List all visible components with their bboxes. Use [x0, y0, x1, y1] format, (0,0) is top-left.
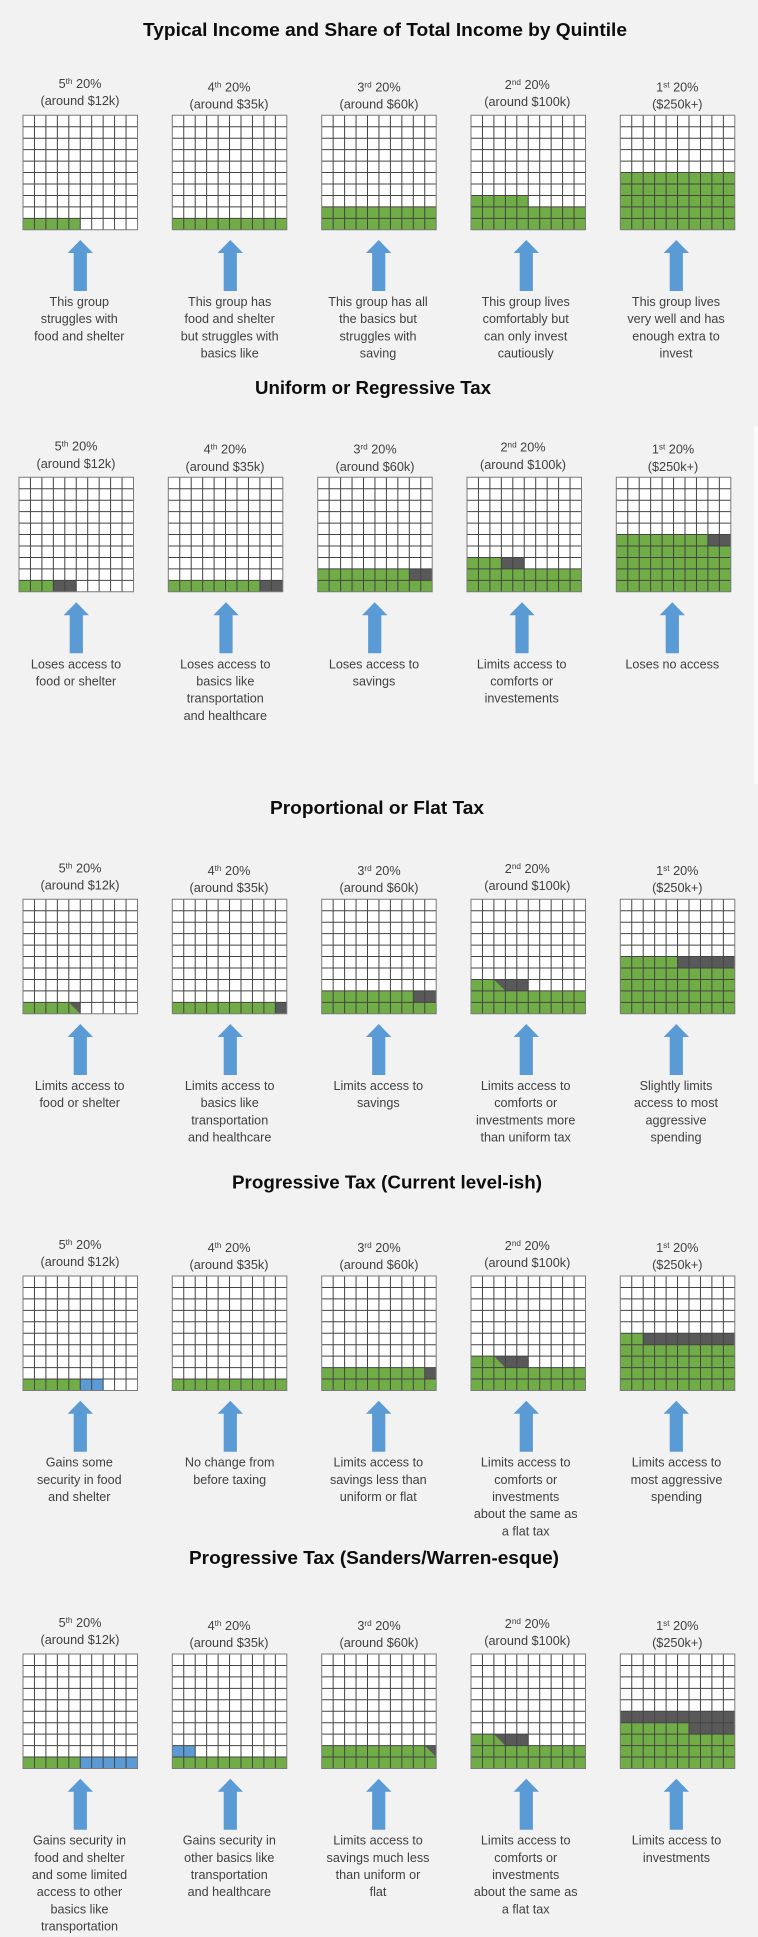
header: 4th 20%: 20% — [221, 864, 250, 878]
header: 1st 20%: st — [663, 80, 670, 89]
grid: 3rd 20% — [322, 115, 436, 230]
header: 2nd 20%: (around $100k) — [484, 879, 570, 893]
description: 2nd 20%: This group lives — [482, 295, 570, 309]
description: 4th 20%: Loses access to — [180, 657, 270, 671]
description: 3rd 20%: savings — [353, 674, 395, 688]
description: 1st 20%: enough extra to — [632, 329, 720, 343]
grid: 3rd 20% — [318, 477, 432, 592]
section: proportional or flat tax — [23, 797, 735, 1144]
title: progressive tax sanders warren: Progressive Tax (Sanders/Warren-esque) — [189, 1547, 559, 1568]
header: 2nd 20%: 20% — [521, 1239, 550, 1253]
description: 1st 20%: Slightly limits — [640, 1079, 712, 1093]
header: 2nd 20%: 2 — [505, 1239, 512, 1253]
header: 1st 20%: ($250k+) — [652, 98, 703, 112]
description: 2nd 20%: than uniform tax — [481, 1130, 572, 1144]
arrow: 3rd 20% — [366, 240, 391, 291]
description: 5th 20%: basics like — [50, 1902, 109, 1916]
header: 3rd 20%: 3 — [357, 80, 364, 94]
description: 2nd 20%: about the same as — [474, 1885, 578, 1899]
description: 5th 20%: Gains security in — [33, 1834, 126, 1848]
grid: 2nd 20% — [471, 899, 586, 1014]
description: 2nd 20%: cautiously — [498, 346, 554, 360]
description: 4th 20%: basics like — [201, 346, 259, 360]
header: 4th 20%: 20% — [221, 80, 250, 94]
header: 3rd 20%: (around $60k) — [340, 1258, 418, 1272]
header: 1st 20%: 1 — [656, 80, 663, 94]
header: 1st 20%: 1 — [656, 1241, 663, 1255]
description: 3rd 20%: savings — [357, 1096, 400, 1110]
header: 4th 20%: 4 — [204, 443, 211, 457]
header: 2nd 20%: nd — [508, 441, 517, 450]
arrow: 2nd 20% — [514, 240, 539, 291]
description: 1st 20%: very well and has — [627, 312, 725, 326]
header: 2nd 20%: 2 — [505, 1617, 512, 1631]
header: 5th 20%: th — [66, 861, 73, 870]
header: 3rd 20%: 20% — [372, 1619, 401, 1633]
header: 1st 20%: st — [663, 1241, 670, 1250]
header: 5th 20%: 5 — [59, 861, 66, 875]
header: 4th 20%: (around $35k) — [190, 1258, 268, 1272]
header: 2nd 20%: 2 — [500, 441, 508, 455]
grid: 2nd 20% — [471, 115, 586, 230]
description: 5th 20%: This group — [50, 295, 109, 309]
description: 4th 20%: No change from — [185, 1456, 275, 1470]
description: 3rd 20%: savings less than — [330, 1473, 427, 1487]
arrow: 2nd 20% — [514, 1401, 539, 1452]
header: 1st 20%: 1 — [656, 864, 663, 878]
grid: 4th 20% — [172, 1276, 287, 1390]
description: 5th 20%: access to other — [37, 1885, 122, 1899]
header: 1st 20%: ($250k+) — [652, 1258, 703, 1272]
grid: 1st 20% — [620, 115, 735, 230]
description: 3rd 20%: flat — [370, 1885, 387, 1899]
grid: 4th 20% — [168, 477, 283, 592]
grid: 4th 20% — [172, 1654, 287, 1768]
description: 4th 20%: transportation — [191, 1868, 268, 1882]
header: 5th 20%: 5 — [59, 1616, 66, 1630]
header: 1st 20%: 20% — [670, 1241, 698, 1255]
description: 2nd 20%: comforts or — [490, 674, 553, 688]
header: 2nd 20%: 2 — [505, 862, 512, 876]
header: 4th 20%: th — [215, 864, 222, 873]
description: 4th 20%: basics like — [196, 674, 254, 688]
description: 5th 20%: security in food — [37, 1473, 122, 1487]
header: 4th 20%: (around $35k) — [190, 1636, 268, 1650]
header: 1st 20%: ($250k+) — [652, 1636, 703, 1650]
header: 3rd 20%: rd — [364, 80, 372, 89]
arrow: 3rd 20% — [366, 1024, 391, 1075]
description: 3rd 20%: Limits access to — [333, 1834, 423, 1848]
header: 4th 20%: th — [215, 1241, 222, 1250]
header: 1st 20%: ($250k+) — [648, 460, 698, 474]
header: 5th 20%: (around $12k) — [40, 1633, 120, 1647]
arrow: 1st 20% — [664, 1401, 689, 1452]
header: 2nd 20%: (around $100k) — [480, 458, 566, 472]
description: 3rd 20%: than uniform or — [336, 1868, 420, 1882]
header: 4th 20%: 20% — [221, 1241, 250, 1255]
grid: 5th 20% — [23, 1654, 138, 1768]
header: 5th 20%: th — [62, 440, 69, 449]
header: 3rd 20%: (around $60k) — [336, 460, 414, 474]
header: 2nd 20%: (around $100k) — [484, 1634, 570, 1648]
header: 2nd 20%: 20% — [521, 1617, 550, 1631]
description: 2nd 20%: investments — [492, 1490, 559, 1504]
header: 2nd 20%: 20% — [517, 441, 546, 455]
description: 4th 20%: other basics like — [184, 1851, 274, 1865]
description: 4th 20%: basics like — [201, 1096, 259, 1110]
description: 5th 20%: Limits access to — [35, 1079, 124, 1093]
header: 3rd 20%: rd — [364, 864, 372, 873]
header: 2nd 20%: 20% — [521, 862, 550, 876]
grid: 4th 20% — [172, 115, 287, 230]
description: 5th 20%: and shelter — [48, 1490, 110, 1504]
description: 3rd 20%: Loses access to — [329, 657, 419, 671]
grid: 1st 20% — [620, 1654, 735, 1768]
header: 5th 20%: (around $12k) — [40, 878, 120, 892]
header: 4th 20%: 4 — [208, 1619, 215, 1633]
arrow: 1st 20% — [660, 602, 685, 653]
header: 1st 20%: 20% — [670, 864, 698, 878]
header: 5th 20%: 20% — [72, 1238, 101, 1252]
description: 5th 20%: and some limited — [32, 1868, 127, 1882]
description: 2nd 20%: about the same as — [474, 1507, 578, 1521]
description: 1st 20%: spending — [650, 1130, 702, 1144]
header: 3rd 20%: rd — [360, 443, 368, 452]
description: 4th 20%: and healthcare — [184, 709, 267, 723]
header: 1st 20%: 20% — [670, 1619, 698, 1633]
header: 3rd 20%: (around $60k) — [340, 881, 418, 895]
description: 4th 20%: but struggles with — [181, 329, 279, 343]
header: 4th 20%: 4 — [208, 1241, 215, 1255]
grid: 3rd 20% — [322, 1276, 436, 1390]
grid: 5th 20% — [23, 115, 138, 230]
title: typical income: Typical Income and Share of Total Income by Quintile — [143, 19, 627, 40]
header: 4th 20%: th — [215, 1619, 222, 1628]
arrow: 5th 20% — [64, 602, 89, 653]
description: 5th 20%: Gains some — [46, 1456, 113, 1470]
header: 3rd 20%: 20% — [372, 1241, 401, 1255]
header: 5th 20%: th — [66, 1616, 73, 1625]
arrow: 4th 20% — [218, 1401, 243, 1452]
description: 4th 20%: Limits access to — [185, 1079, 274, 1093]
arrow: 5th 20% — [68, 1401, 93, 1452]
description: 4th 20%: and healthcare — [188, 1885, 271, 1899]
description: 3rd 20%: savings much less — [327, 1851, 429, 1865]
description: 2nd 20%: comforts or — [494, 1473, 557, 1487]
grid: 3rd 20% — [322, 1654, 436, 1768]
grid: 4th 20% — [172, 899, 287, 1014]
section: uniform or regressive tax — [19, 377, 731, 723]
arrow: 4th 20% — [218, 1779, 243, 1830]
header: 4th 20%: th — [215, 80, 222, 89]
description: 5th 20%: food or shelter — [36, 674, 116, 688]
description: 4th 20%: before taxing — [193, 1473, 266, 1487]
header: 5th 20%: 20% — [72, 1616, 101, 1630]
arrow: 5th 20% — [68, 240, 93, 291]
header: 3rd 20%: 3 — [357, 864, 364, 878]
section: progressive tax current — [23, 1171, 735, 1538]
description: 4th 20%: transportation — [191, 1113, 268, 1127]
header: 3rd 20%: 3 — [353, 443, 360, 457]
section: progressive tax sanders warren — [23, 1547, 735, 1933]
description: 2nd 20%: investements — [485, 692, 559, 706]
header: 4th 20%: (around $35k) — [190, 98, 268, 112]
header: 5th 20%: 5 — [59, 1238, 66, 1252]
description: 5th 20%: transportation — [41, 1919, 118, 1933]
header: 2nd 20%: 2 — [505, 78, 512, 92]
header: 2nd 20%: 20% — [521, 78, 550, 92]
header: 5th 20%: 20% — [72, 861, 101, 875]
header: 3rd 20%: 3 — [357, 1241, 364, 1255]
header: 3rd 20%: rd — [364, 1241, 372, 1250]
grid: 2nd 20% — [467, 477, 582, 592]
description: 1st 20%: investments — [643, 1851, 710, 1865]
description: 2nd 20%: Limits access to — [481, 1834, 570, 1848]
header: 1st 20%: st — [663, 864, 670, 873]
description: 5th 20%: food and shelter — [34, 329, 124, 343]
arrow: 2nd 20% — [514, 1779, 539, 1830]
description: 1st 20%: Limits access to — [632, 1834, 721, 1848]
header: 5th 20%: 20% — [72, 77, 101, 91]
arrow: 3rd 20% — [362, 602, 387, 653]
header: 5th 20%: 5 — [59, 77, 66, 91]
header: 4th 20%: th — [211, 443, 218, 452]
title: proportional or flat tax: Proportional or Flat Tax — [270, 797, 485, 818]
arrow: 1st 20% — [664, 1024, 689, 1075]
header: 1st 20%: 1 — [656, 1619, 663, 1633]
grid: 1st 20% — [616, 477, 731, 592]
arrow: 5th 20% — [68, 1779, 93, 1830]
header: 4th 20%: 4 — [208, 864, 215, 878]
header: 1st 20%: 20% — [670, 80, 698, 94]
arrow: 1st 20% — [664, 240, 689, 291]
description: 2nd 20%: investments — [492, 1868, 559, 1882]
header: 5th 20%: (around $12k) — [40, 1255, 120, 1269]
arrow: 2nd 20% — [514, 1024, 539, 1075]
header: 1st 20%: 20% — [665, 443, 694, 457]
description: 3rd 20%: the basics but — [339, 312, 417, 326]
grid: 1st 20% — [620, 899, 735, 1014]
section: typical income and share — [23, 19, 735, 360]
header: 5th 20%: 20% — [68, 440, 97, 454]
header: 3rd 20%: (around $60k) — [340, 98, 418, 112]
arrow: 4th 20% — [218, 240, 243, 291]
header: 3rd 20%: (around $60k) — [340, 1636, 418, 1650]
description: 1st 20%: Limits access to — [632, 1456, 721, 1470]
description: 4th 20%: Gains security in — [183, 1834, 276, 1848]
description: 5th 20%: food or shelter — [39, 1096, 120, 1110]
header: 5th 20%: (around $12k) — [36, 457, 116, 471]
header: 5th 20%: (around $12k) — [40, 94, 120, 108]
description: 3rd 20%: struggles with — [340, 329, 416, 343]
description: 4th 20%: transportation — [187, 692, 264, 706]
header: 2nd 20%: (around $100k) — [484, 95, 570, 109]
description: 1st 20%: Loses no access — [625, 657, 719, 671]
header: 5th 20%: th — [66, 1238, 73, 1247]
description: 2nd 20%: investments more — [476, 1113, 575, 1127]
grid: 2nd 20% — [471, 1276, 586, 1390]
description: 1st 20%: access to most — [634, 1096, 718, 1110]
description: 5th 20%: struggles with — [41, 312, 118, 326]
header: 1st 20%: 1 — [652, 443, 659, 457]
header: 3rd 20%: 20% — [372, 80, 401, 94]
header: 4th 20%: (around $35k) — [186, 460, 264, 474]
header: 2nd 20%: (around $100k) — [484, 1256, 570, 1270]
title: uniform or regressive tax: Uniform or Regressive Tax — [255, 377, 492, 398]
header: 4th 20%: (around $35k) — [190, 881, 268, 895]
header: 2nd 20%: nd — [512, 78, 521, 87]
grid: 1st 20% — [620, 1276, 735, 1390]
description: 2nd 20%: Limits access to — [477, 657, 566, 671]
header: 1st 20%: st — [659, 443, 666, 452]
description: 1st 20%: invest — [660, 346, 693, 360]
header: 2nd 20%: nd — [512, 1239, 521, 1248]
arrow: 1st 20% — [664, 1779, 689, 1830]
description: 1st 20%: most aggressive — [631, 1473, 722, 1487]
grid: 2nd 20% — [471, 1654, 586, 1768]
description: 3rd 20%: uniform or flat — [340, 1490, 417, 1504]
grid: 5th 20% — [23, 1276, 138, 1390]
description: 3rd 20%: Limits access to — [334, 1456, 423, 1470]
description: 2nd 20%: comforts or — [494, 1851, 557, 1865]
description: 4th 20%: and healthcare — [188, 1130, 271, 1144]
description: 2nd 20%: a flat tax — [502, 1524, 550, 1538]
description: 4th 20%: This group has — [188, 295, 271, 309]
arrow: 3rd 20% — [366, 1779, 391, 1830]
header: 4th 20%: 4 — [208, 80, 215, 94]
header: 4th 20%: 20% — [217, 443, 246, 457]
description: 3rd 20%: saving — [360, 346, 396, 360]
description: 2nd 20%: comfortably but — [483, 312, 569, 326]
grid: 3rd 20% — [322, 899, 436, 1014]
header: 5th 20%: th — [66, 77, 73, 86]
description: 3rd 20%: This group has all — [328, 295, 428, 309]
description: 3rd 20%: Limits access to — [334, 1079, 423, 1093]
header: 2nd 20%: nd — [512, 1617, 521, 1626]
header: 2nd 20%: nd — [512, 862, 521, 871]
grid: 5th 20% — [19, 477, 134, 592]
arrow: 5th 20% — [68, 1024, 93, 1075]
header: 3rd 20%: rd — [364, 1619, 372, 1628]
description: 1st 20%: spending — [651, 1490, 702, 1504]
title: progressive tax current: Progressive Tax (Current level-ish) — [232, 1171, 542, 1192]
header: 5th 20%: 5 — [55, 440, 62, 454]
arrow: 3rd 20% — [366, 1401, 391, 1452]
description: 1st 20%: This group lives — [632, 295, 720, 309]
header: 1st 20%: ($250k+) — [652, 881, 703, 895]
header: 3rd 20%: 20% — [372, 864, 401, 878]
grid: 5th 20% — [23, 899, 138, 1014]
header: 3rd 20%: 20% — [368, 443, 397, 457]
arrow: 4th 20% — [213, 602, 239, 653]
description: 2nd 20%: can only invest — [484, 329, 568, 343]
header: 3rd 20%: 3 — [357, 1619, 364, 1633]
description: 4th 20%: food and shelter — [185, 312, 275, 326]
description: 5th 20%: Loses access to — [31, 657, 121, 671]
description: 2nd 20%: a flat tax — [502, 1902, 550, 1916]
description: 1st 20%: aggressive — [646, 1113, 706, 1127]
description: 2nd 20%: Limits access to — [481, 1079, 570, 1093]
arrow: 4th 20% — [218, 1024, 243, 1075]
header: 1st 20%: st — [663, 1619, 670, 1628]
description: 5th 20%: food and shelter — [34, 1851, 125, 1865]
arrow: 2nd 20% — [509, 602, 535, 653]
description: 2nd 20%: comforts or — [494, 1096, 557, 1110]
header: 4th 20%: 20% — [221, 1619, 250, 1633]
description: 2nd 20%: Limits access to — [481, 1456, 570, 1470]
